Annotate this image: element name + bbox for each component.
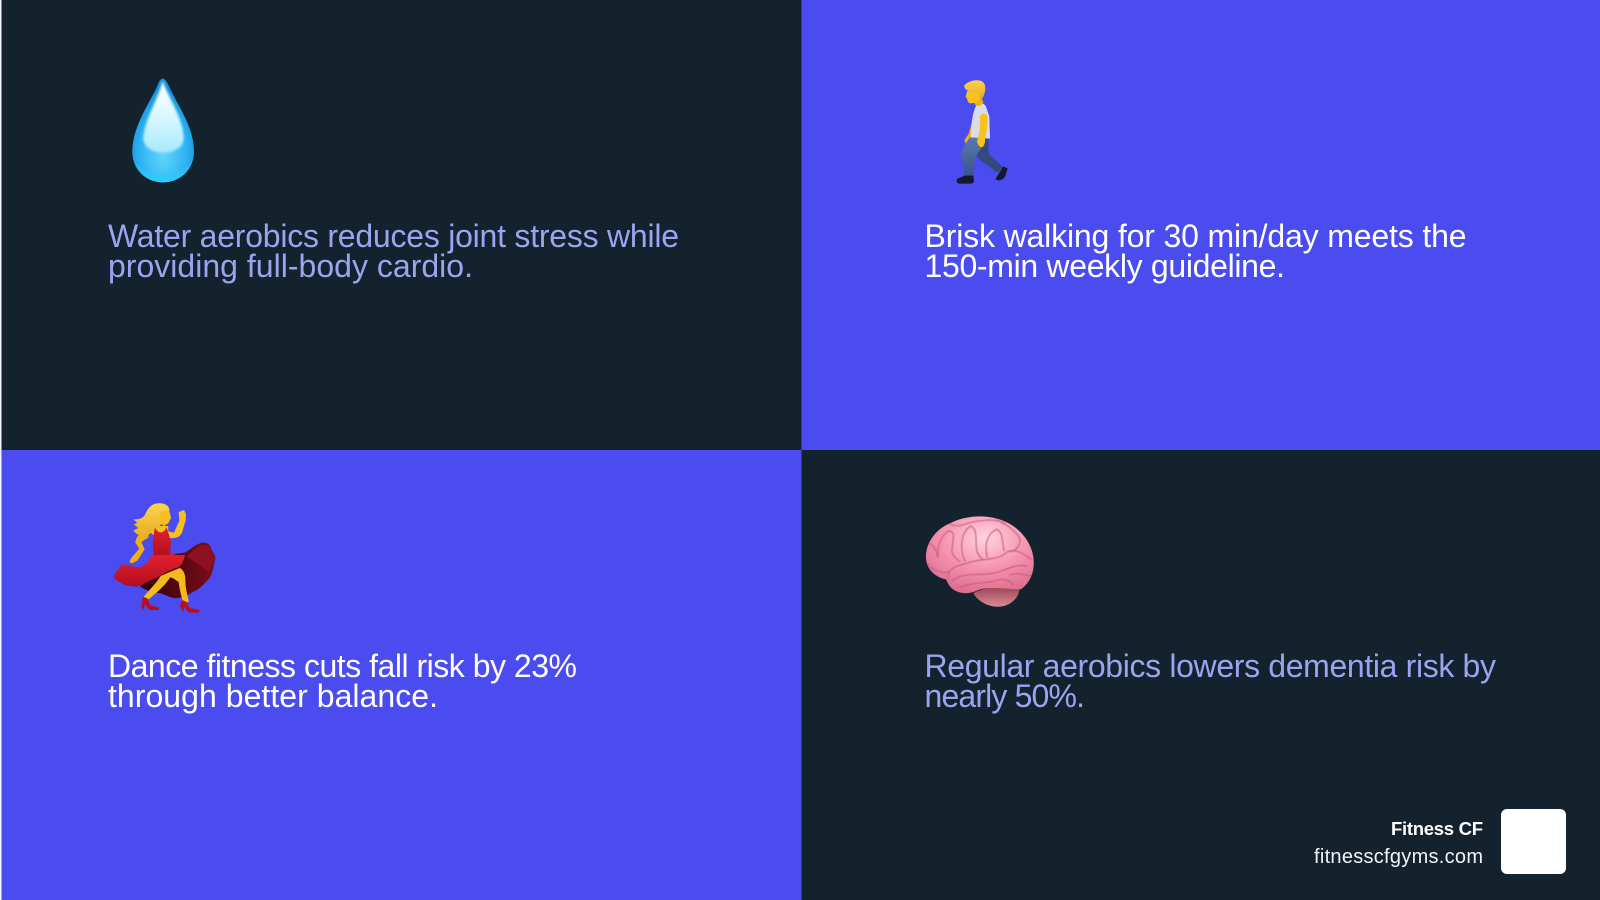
text: dance fitness fact: through better balance. [108,678,438,714]
text: brain health fact: nearly 50%. [924,678,1085,714]
text: water aerobics fact: Water aerobics reduces joint stress while [108,218,679,254]
icon: brain [926,516,1034,607]
red skirt front [113,553,185,587]
dark skirt back [140,543,215,598]
text: brisk walking fact [924,218,1466,284]
text: dance fitness fact [108,648,577,714]
panel: dance fitness [2,450,802,900]
raised arm [165,510,186,538]
front arm [977,114,988,147]
back arm [129,529,149,563]
logo placeholder [1501,809,1566,874]
legs [144,568,189,603]
panel: water aerobics [2,0,802,450]
brand name: Fitness CF [1391,818,1483,839]
icon: water drop [132,79,194,182]
back leg [975,137,1003,173]
text: brain health fact [924,648,1496,714]
text: brain health fact: Regular aerobics lowers dementia risk by [924,648,1496,684]
head [973,97,983,106]
text: dance fitness fact: Dance fitness cuts fall risk by 23% [108,648,577,684]
text: water aerobics fact [108,218,679,284]
panel: brain health [802,450,1600,900]
icon: woman dancing [113,503,215,613]
footer brand [1314,809,1566,874]
text: brisk walking fact: 150-min weekly guideline. [924,248,1285,284]
text: water aerobics fact: providing full-body cardio. [108,248,473,284]
chest skin and hair [147,526,168,537]
brand url: fitnesscfgyms.com [1314,846,1483,868]
text: brisk walking fact: Brisk walking for 30 min/day meets the [924,218,1466,254]
torso [971,103,990,139]
back arm [964,119,977,143]
panel: brisk walking [802,0,1600,450]
shoes [141,597,159,610]
icon: person walking [957,80,1008,184]
torso dress [153,527,171,555]
front leg [962,137,984,177]
